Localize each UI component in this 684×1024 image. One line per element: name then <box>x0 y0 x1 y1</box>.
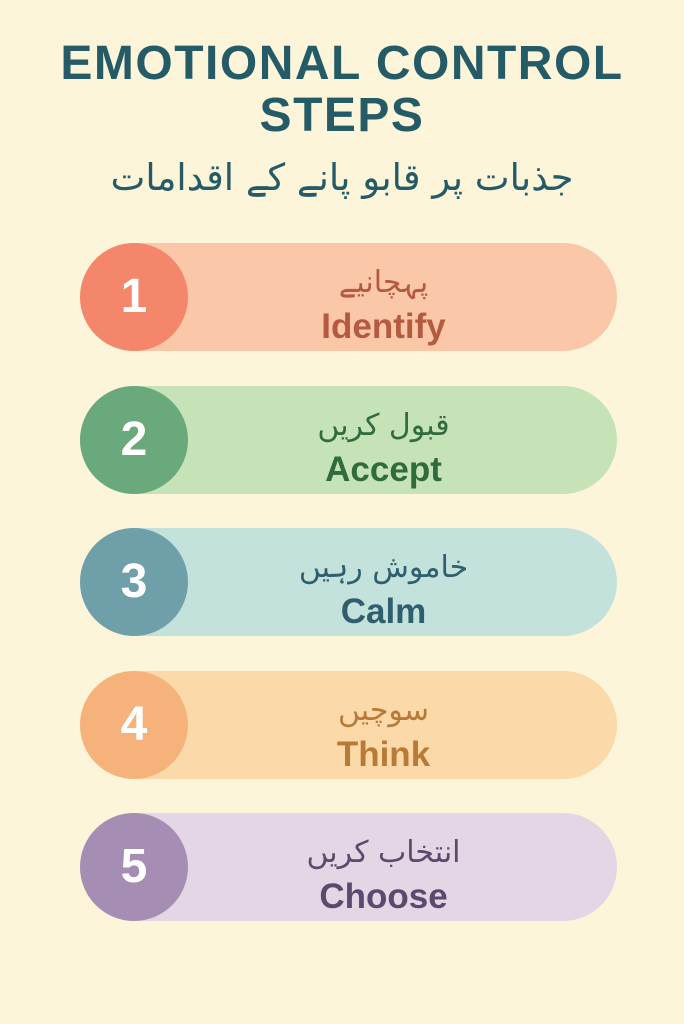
title: EMOTIONAL CONTROL <box>60 37 624 90</box>
step 5: انتخاب کریں <box>306 835 461 870</box>
step 2 <box>80 386 617 494</box>
step 5: 5 <box>121 840 147 893</box>
step 4 <box>80 671 617 779</box>
step 1: Identify <box>321 307 446 346</box>
step 5: Choose <box>319 877 448 916</box>
step 2: 2 <box>121 413 147 466</box>
step 4: سوچیں <box>338 693 429 728</box>
step 1: 1 <box>121 270 147 323</box>
step 3: 3 <box>121 555 147 608</box>
title <box>60 37 624 142</box>
step 4: Think <box>337 735 430 774</box>
step 4: 4 <box>121 698 147 751</box>
step 5 <box>80 813 617 921</box>
step 3: خاموش رہیں <box>299 550 468 585</box>
step 1 <box>80 243 617 351</box>
step 3: Calm <box>341 592 426 631</box>
urdu subtitle: جذبات پر قابو پانے کے اقدامات <box>110 156 574 199</box>
step 2: قبول کریں <box>317 408 450 443</box>
title: STEPS <box>260 89 424 142</box>
step 3 <box>80 528 617 636</box>
step 1: پہچانیے <box>339 265 428 300</box>
step 2: Accept <box>325 450 442 489</box>
